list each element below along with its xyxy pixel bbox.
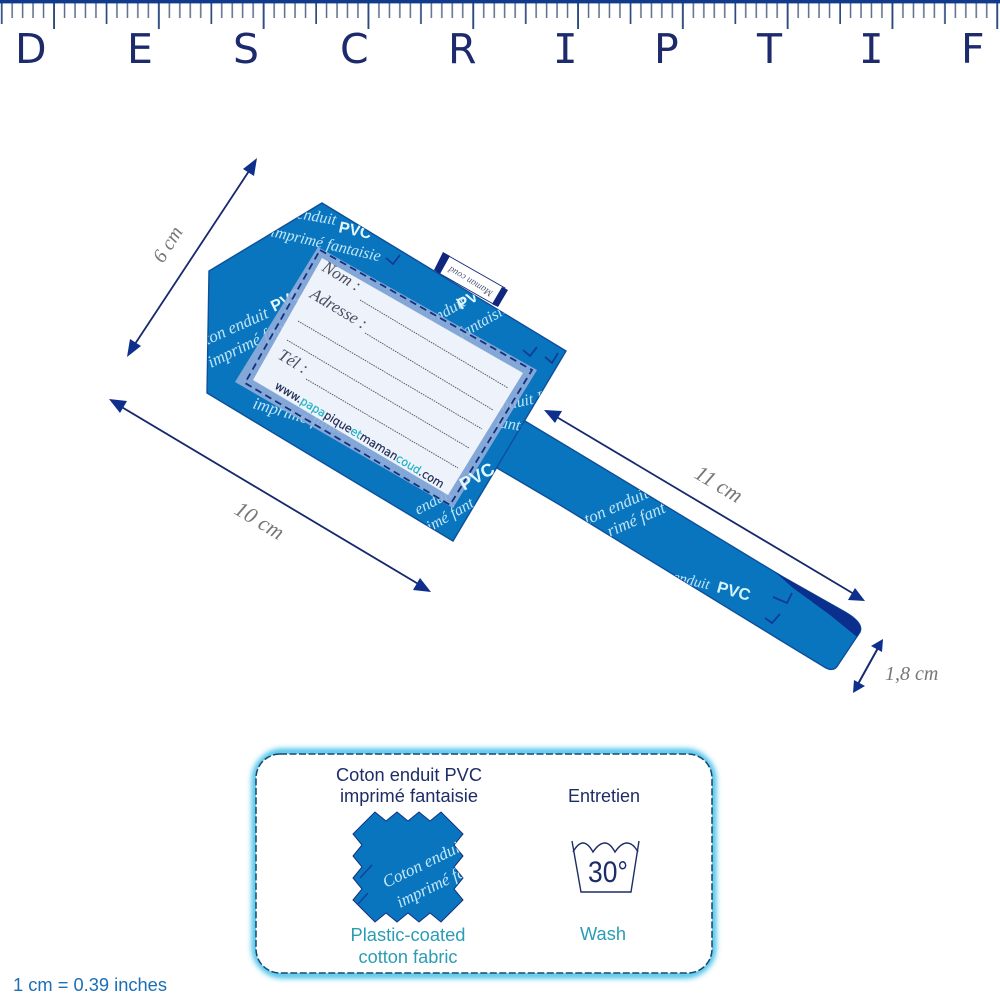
label tab [434, 252, 508, 307]
tag pattern text: PVC [337, 219, 373, 243]
fabric heading [336, 765, 482, 806]
unit conversion note: 1 cm = 0.39 inches [13, 975, 167, 995]
card face [253, 258, 523, 495]
tag stitches [386, 255, 558, 363]
panel glow [255, 752, 713, 975]
address card [235, 247, 537, 508]
card frame [235, 247, 537, 508]
icon: wash 30 degrees: 30° [588, 856, 628, 889]
tag pattern text: enduit [426, 293, 469, 328]
title: DESCRIPTIF: P [654, 25, 679, 73]
card overlay PVC: PVC [456, 459, 498, 494]
strap pattern text [584, 490, 750, 600]
title: DESCRIPTIF: D [15, 25, 47, 73]
care caption: Wash [580, 924, 626, 944]
fabric heading: Coton enduit PVC [336, 765, 482, 785]
tag pattern text: imé fant [424, 494, 478, 535]
title: DESCRIPTIF: E [127, 25, 153, 73]
tag pattern text: PVC [454, 282, 492, 313]
ruler [0, 0, 1000, 30]
fabric heading: imprimé fantaisie [340, 786, 478, 806]
panel border [256, 754, 712, 973]
fabric swatch: Coton enduit [379, 835, 468, 892]
tag pattern text: enduit PVC [492, 384, 569, 416]
form text: Nom : [318, 257, 365, 295]
tag pattern text: imprimé fantaisie [269, 223, 382, 265]
label: 10 cm: 10 cm [230, 496, 289, 545]
card stitching [245, 250, 532, 505]
fabric caption [350, 925, 466, 967]
form text: Adresse : [306, 284, 371, 333]
strap pattern text: PVC [715, 578, 752, 605]
icon: wash 30 degrees [572, 841, 639, 892]
tag pattern text: enduit [412, 484, 456, 519]
arrow: 10 cm [109, 399, 431, 592]
strap pattern text: ton enduit [581, 483, 652, 529]
title: DESCRIPTIF: S [233, 25, 259, 73]
title: DESCRIPTIF: I [553, 25, 578, 73]
title: DESCRIPTIF: I [859, 25, 884, 73]
fabric caption: cotton fabric [358, 947, 458, 967]
fabric swatch: imprimé fantaisie [393, 842, 510, 912]
strap pattern text: enduit [671, 569, 712, 594]
title: DESCRIPTIF: F [961, 25, 985, 73]
title: DESCRIPTIF: T [756, 25, 783, 73]
form lines [287, 300, 508, 468]
title: DESCRIPTIF: R [448, 25, 476, 73]
tag pattern text: fantaisie [456, 300, 512, 342]
tag pattern text: imprimé fantaisie [204, 302, 321, 372]
strap fold [775, 572, 861, 637]
fabric swatch [352, 811, 464, 923]
label: 6 cm: 6 cm [149, 222, 188, 267]
form text: Tél : [275, 345, 312, 378]
arrow: 11 cm [544, 410, 865, 601]
strap [496, 420, 862, 670]
care heading: Entretien [568, 786, 640, 806]
arrow: 1,8 cm [853, 639, 883, 693]
website: www.papapiqueetmamancoud.com [272, 379, 447, 491]
fabric caption: Plastic-coated [350, 925, 466, 945]
label: 1,8 cm: 1,8 cm [885, 663, 938, 685]
strap stitches [765, 593, 792, 623]
care panel [255, 752, 713, 975]
tag pattern text: fantaisie [494, 414, 551, 439]
tag pattern text: enduit [295, 205, 338, 229]
title: DESCRIPTIF [15, 25, 985, 73]
title: DESCRIPTIF: C [340, 25, 369, 73]
strap pattern text: rimé fant [604, 498, 669, 541]
tag body [201, 203, 569, 541]
arrow: 6 cm [127, 158, 257, 357]
tag pattern text: ton enduit [201, 303, 272, 349]
label: 11 cm: 11 cm [690, 460, 747, 508]
form text [275, 257, 371, 378]
tag pattern text: PVC [268, 286, 306, 316]
tag pattern text [208, 210, 542, 530]
label tab: Maman coud [447, 263, 496, 298]
tag pattern text: imprimé fantaisie [251, 394, 371, 445]
